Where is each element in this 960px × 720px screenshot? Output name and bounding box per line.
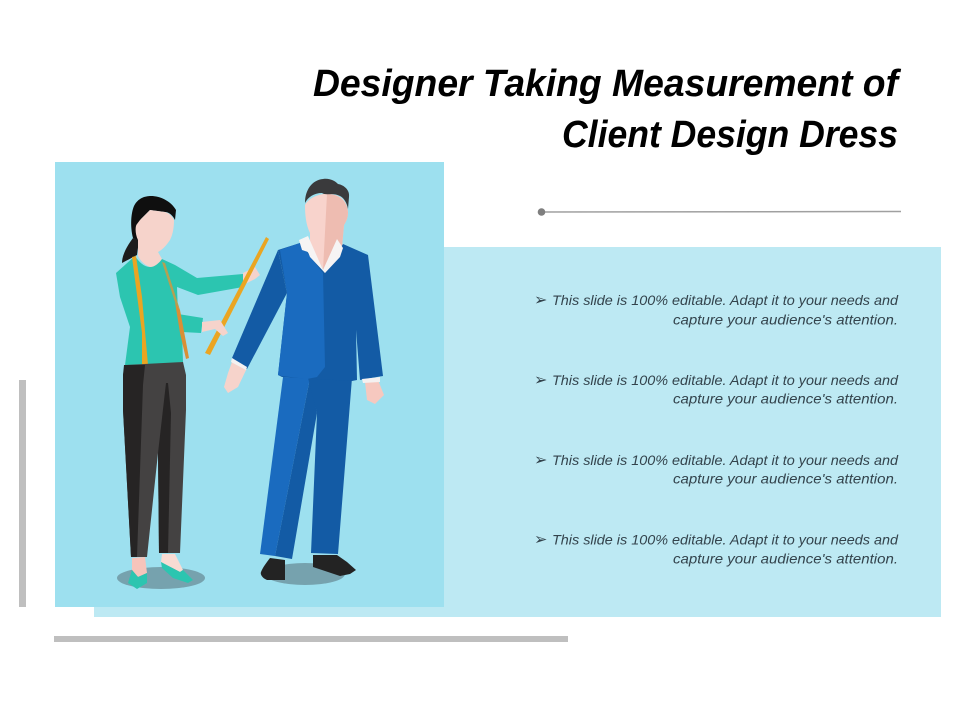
left shoe [261, 558, 285, 580]
left foot [132, 557, 147, 577]
suit jacket front panel [278, 243, 325, 379]
shirt cuffs [231, 358, 380, 383]
right shoe [161, 562, 193, 583]
trousers left leg [260, 377, 310, 556]
trousers middle panel [275, 378, 317, 559]
hair [131, 196, 176, 240]
shirt collar [299, 236, 343, 273]
head and neck [305, 194, 348, 273]
measuring tape right strand upper [162, 262, 180, 310]
bullet 2: capture your audience's attention. [673, 390, 898, 406]
title [313, 63, 901, 156]
suit left sleeve [232, 250, 287, 369]
bullet 4 [534, 530, 899, 566]
face and neck [136, 210, 174, 267]
far hand [243, 267, 260, 285]
bullet 4: capture your audience's attention. [673, 550, 898, 566]
title: Client Design Dress [562, 114, 898, 156]
trouser dark panel right [158, 383, 171, 553]
decorative line with dot [538, 208, 901, 216]
bullet 1: This slide is 100% editable. Adapt it to your needs and [552, 292, 899, 308]
bullet list [534, 290, 899, 566]
right foot [161, 554, 183, 572]
trousers gray [123, 362, 186, 557]
bullet 1: capture your audience's attention. [673, 312, 898, 328]
left grey bar [19, 380, 26, 607]
left hand [224, 362, 247, 393]
trousers right leg [308, 378, 352, 554]
right hand [365, 380, 384, 404]
near hand [202, 320, 228, 336]
bullet 1: ➢ [534, 290, 547, 309]
illustration: woman measuring [116, 196, 269, 589]
suit jacket back [278, 243, 383, 381]
bullet 4: ➢ [534, 530, 547, 548]
bullet 3: capture your audience's attention. [673, 470, 898, 486]
panel: text background [94, 247, 941, 617]
bullet 3 [534, 450, 899, 486]
bullet 4: This slide is 100% editable. Adapt it to your needs and [552, 532, 899, 548]
floor shadow [117, 567, 205, 589]
title: Designer Taking Measurement of [313, 63, 901, 105]
ruler [205, 237, 269, 355]
trouser dark panel left [123, 365, 145, 557]
bullet 2 [534, 370, 899, 406]
measuring tape right strand lower [175, 302, 189, 359]
bottom grey bar [54, 636, 568, 642]
bullet 2: This slide is 100% editable. Adapt it to your needs and [552, 372, 899, 388]
face shade [323, 194, 348, 273]
hair [305, 179, 349, 209]
ponytail [122, 238, 139, 263]
bullet 3: This slide is 100% editable. Adapt it to your needs and [552, 452, 899, 468]
illustration: male client in suit [224, 179, 384, 585]
bullet 3: ➢ [534, 450, 547, 469]
right shoe [313, 555, 356, 576]
floor shadow [265, 563, 345, 585]
bullet 2: ➢ [534, 370, 547, 389]
panel: illustration background [55, 162, 444, 607]
left shoe [128, 570, 147, 589]
bullet 1 [534, 290, 899, 328]
measuring tape left strand [132, 256, 148, 379]
shirt [116, 256, 243, 365]
